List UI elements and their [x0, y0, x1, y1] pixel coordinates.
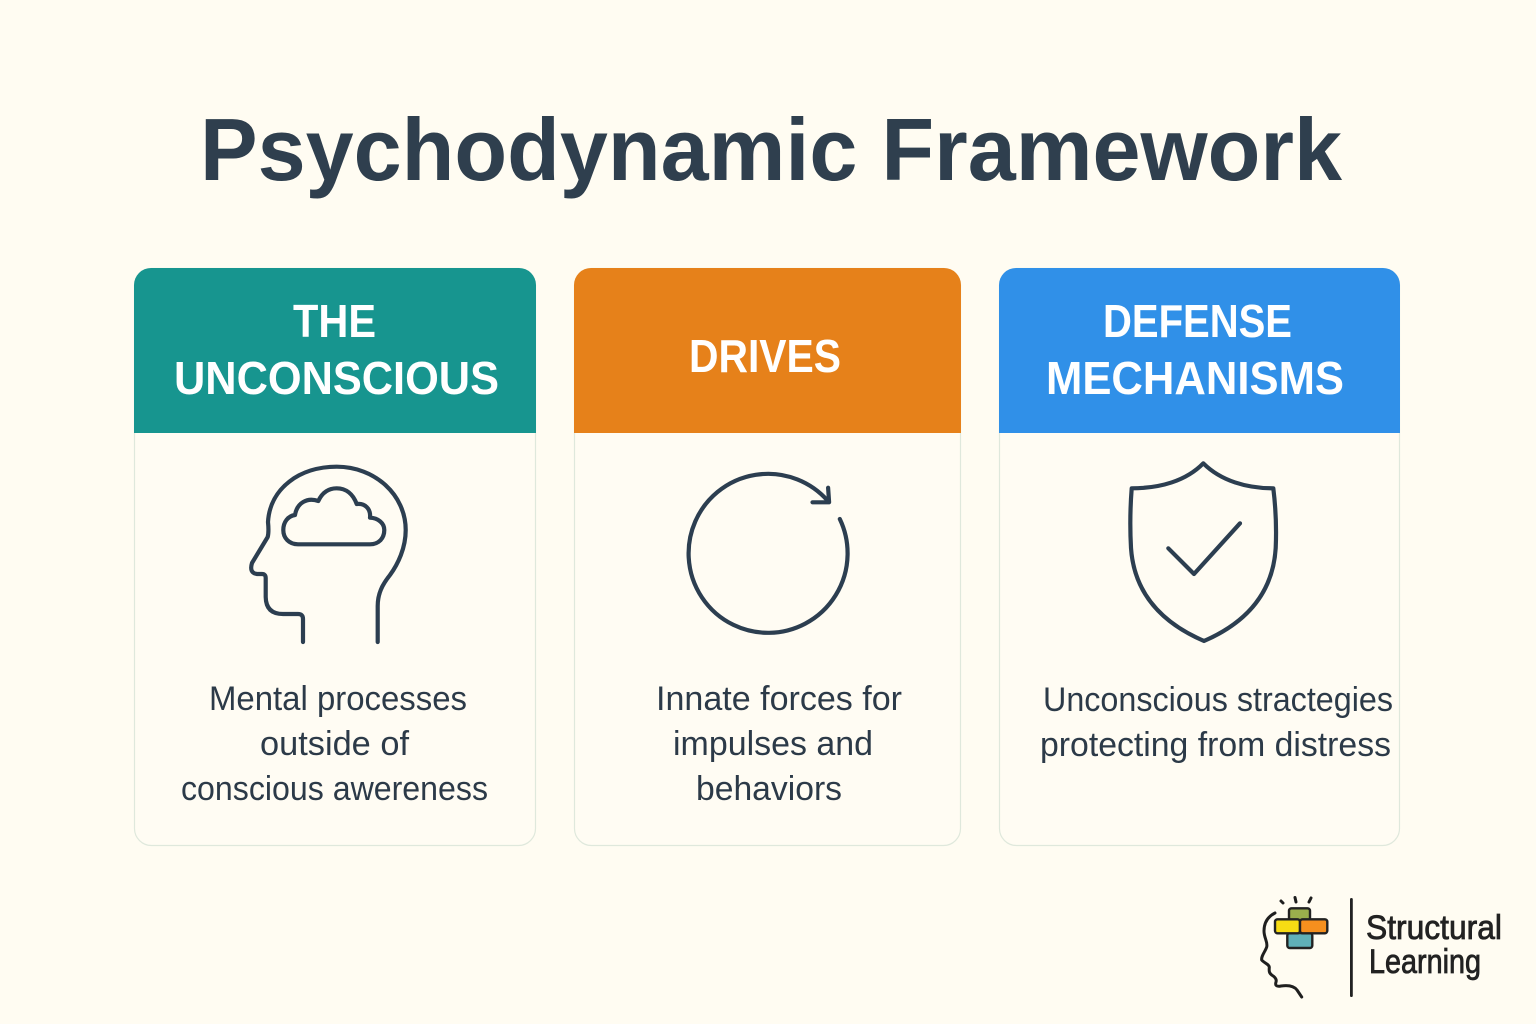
logo: structural learning — [1262, 898, 1502, 997]
text: defense description: Unconscious stractegies — [1043, 681, 1393, 719]
text: unconscious description: Mental processes — [209, 680, 467, 718]
panel: the unconscious — [134, 268, 536, 846]
text: unconscious description: outside of — [260, 725, 410, 763]
title: Psychodynamic Framework — [200, 100, 1343, 199]
wordmark: Learning — [1369, 943, 1481, 981]
header: the unconscious — [134, 268, 536, 433]
text: unconscious description: conscious awereness — [181, 770, 488, 808]
header: defense mechanisms — [999, 268, 1400, 433]
text: drives description: behaviors — [696, 770, 842, 808]
icon: circular arrow — [689, 474, 848, 633]
header: defense mechanisms: MECHANISMS — [1046, 352, 1344, 404]
text: unconscious description — [181, 680, 488, 808]
text: defense description: protecting from distress — [1040, 726, 1391, 764]
wordmark — [1366, 909, 1502, 981]
icon: head with cloud — [251, 467, 406, 642]
wordmark: Structural — [1366, 909, 1502, 947]
text: drives description: Innate forces for — [656, 680, 902, 718]
header: defense mechanisms: DEFENSE — [1103, 295, 1292, 347]
text: defense description — [1040, 681, 1393, 764]
panel: defense mechanisms — [999, 268, 1400, 846]
icon: shield with check — [1130, 463, 1276, 641]
icon: head with blocks — [1262, 898, 1327, 997]
panel: drives — [574, 268, 961, 846]
header: drives — [574, 268, 961, 433]
header: the unconscious: UNCONSCIOUS — [174, 352, 499, 404]
text: drives description — [656, 680, 902, 808]
header: drives: DRIVES — [689, 330, 841, 382]
header: the unconscious: THE — [293, 295, 376, 347]
text: drives description: impulses and — [673, 725, 873, 763]
